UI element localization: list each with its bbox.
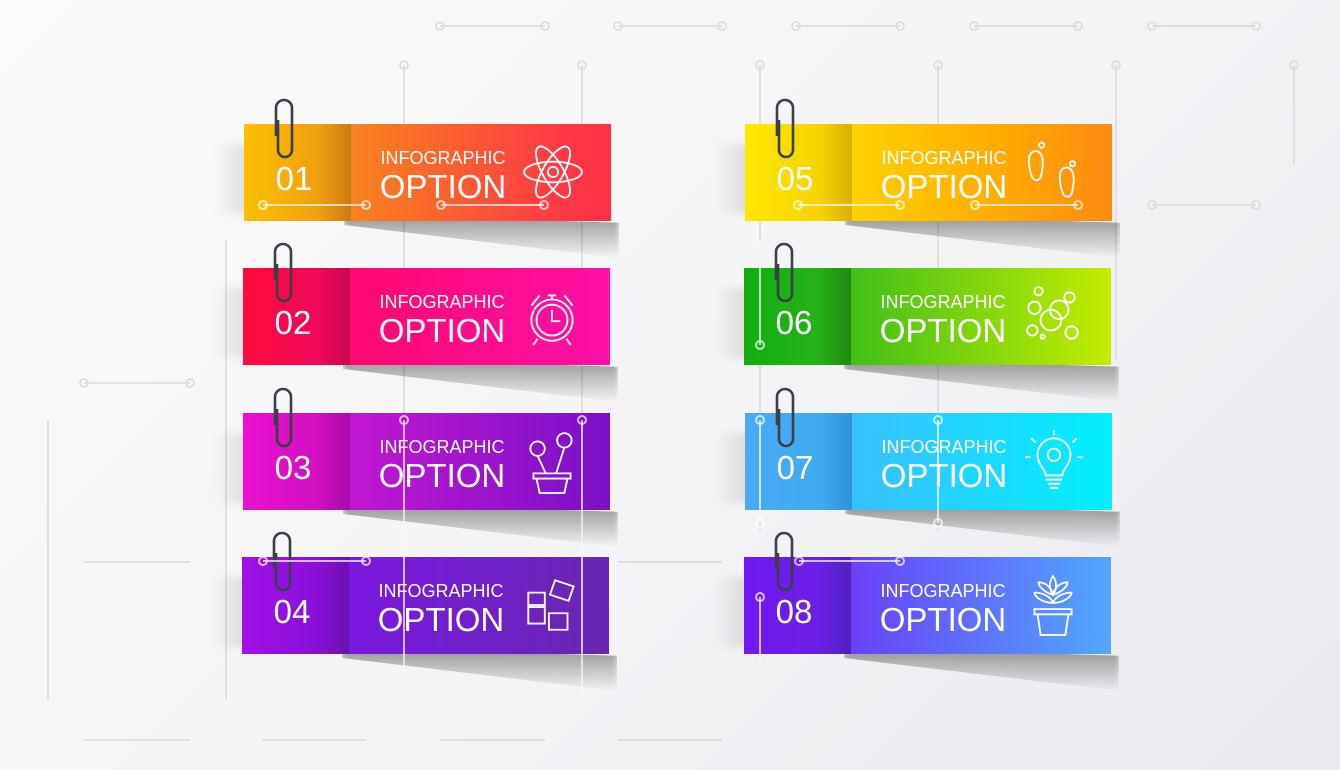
card 02: 02 [275,304,311,341]
card 04: INFOGRAPHIC [378,581,504,601]
icon: alarm clock [530,294,574,346]
paperclip [272,532,292,592]
icon: light bulb [1025,430,1083,489]
card 07 [726,388,1120,544]
paperclip [274,98,294,158]
card 08: INFOGRAPHIC [880,581,1006,601]
card 03: OPTION [379,457,505,494]
card 02 [224,242,618,398]
paperclip [274,388,292,448]
card 08 [725,532,1119,688]
paperclip [774,532,794,592]
card 07: INFOGRAPHIC [881,437,1006,457]
card 06: INFOGRAPHIC [880,292,1006,312]
icon: footprints [1028,142,1076,198]
icon: bubbles [1026,286,1079,340]
card 01: 01 [276,160,312,197]
paperclip [774,242,794,302]
icon: atom [523,146,583,198]
card 03 [224,388,618,544]
card 05 [726,98,1120,254]
paperclip [274,242,292,302]
icon: succulent plant [1034,574,1072,636]
card 07: OPTION [881,457,1007,494]
card 04: 04 [274,593,310,630]
card 01: INFOGRAPHIC [380,148,506,168]
icon: puzzle [527,579,575,631]
paperclip [776,388,794,448]
card 06: 06 [776,304,812,341]
card 08: OPTION [880,601,1006,638]
card 01: OPTION [380,168,506,205]
card 05: 05 [777,160,813,197]
card 07: 07 [777,449,813,486]
card 05: OPTION [881,168,1007,205]
card 03: 03 [275,449,311,486]
card 01 [225,98,619,254]
paperclip [776,98,794,158]
card 02: OPTION [379,312,505,349]
card 06 [725,242,1119,398]
card 04: OPTION [378,601,504,638]
card 05: INFOGRAPHIC [881,148,1006,168]
card 04 [223,532,617,688]
card 08: 08 [776,593,812,630]
card 02: INFOGRAPHIC [379,292,504,312]
icon: flower pot [529,432,572,494]
card 06: OPTION [880,312,1006,349]
card 03: INFOGRAPHIC [379,437,504,457]
